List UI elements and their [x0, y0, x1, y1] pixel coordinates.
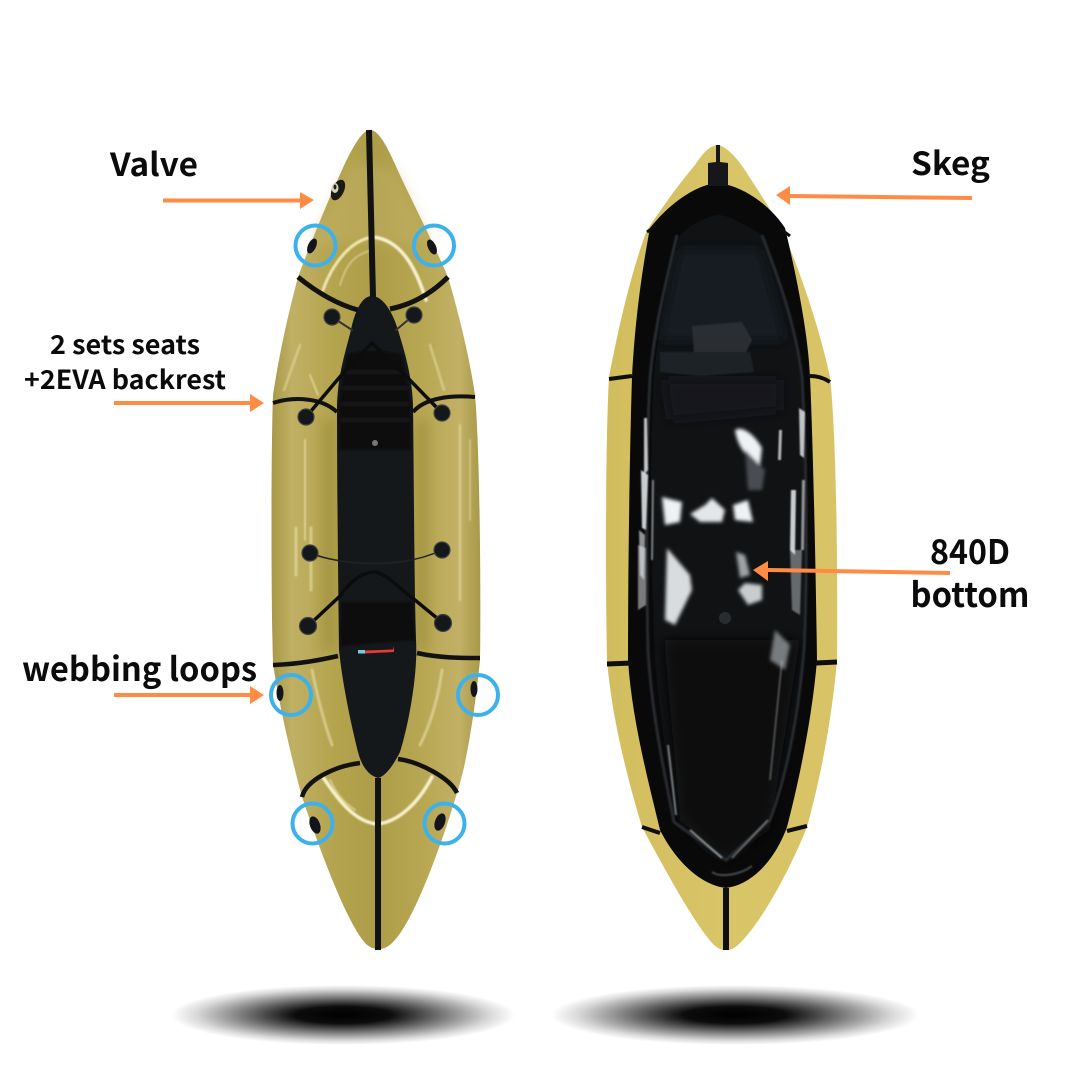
floor shading	[660, 250, 800, 860]
tube highlights	[284, 237, 470, 824]
valve	[328, 177, 348, 203]
callout: webbing loop circles	[271, 226, 498, 844]
hull outline	[272, 130, 480, 949]
second seat pad	[340, 602, 415, 646]
webbing loop holes	[276, 237, 478, 835]
label: 840D bottom: 840D	[930, 525, 1010, 574]
red label	[358, 646, 394, 654]
arrow: 840D bottom	[753, 561, 950, 581]
yellow tube seams	[607, 226, 837, 950]
reflection: bottom seam	[668, 660, 782, 875]
shadow: left kayak	[171, 985, 515, 1045]
label: 840D bottom	[910, 525, 1030, 617]
shadow: right kayak	[551, 985, 919, 1045]
bow shade	[310, 160, 432, 245]
seams	[273, 130, 480, 950]
label: webbing loops: webbing loops	[22, 643, 257, 691]
kayak: top view	[272, 130, 480, 950]
straps and cords	[306, 315, 443, 626]
inner floor	[651, 215, 804, 862]
arrow: webbing loops	[114, 686, 264, 704]
hull outline	[606, 145, 837, 950]
arrow: Skeg	[776, 186, 972, 205]
arrow: Valve	[163, 192, 314, 209]
black hull	[628, 183, 817, 888]
D-ring patches	[298, 307, 452, 634]
rear straps	[660, 322, 754, 376]
label: +2EVA backrest: +2EVA backrest	[24, 360, 226, 397]
label: 840D bottom: bottom	[910, 568, 1030, 617]
reflection: glare patches	[662, 429, 790, 670]
reflection: seams	[638, 408, 805, 615]
tube shading beside cockpit	[322, 420, 429, 650]
skeg	[708, 145, 728, 186]
label: Skeg: Skeg	[911, 139, 990, 185]
kayak: bottom view	[606, 145, 837, 950]
valve plug	[719, 612, 731, 624]
label: 2 sets seats: 2 sets seats	[50, 325, 200, 362]
inner panel seams	[647, 235, 806, 860]
label: Valve: Valve	[109, 140, 198, 186]
seat backrest	[339, 351, 411, 450]
cockpit fabric	[337, 296, 416, 778]
arrow: seats	[114, 394, 264, 412]
